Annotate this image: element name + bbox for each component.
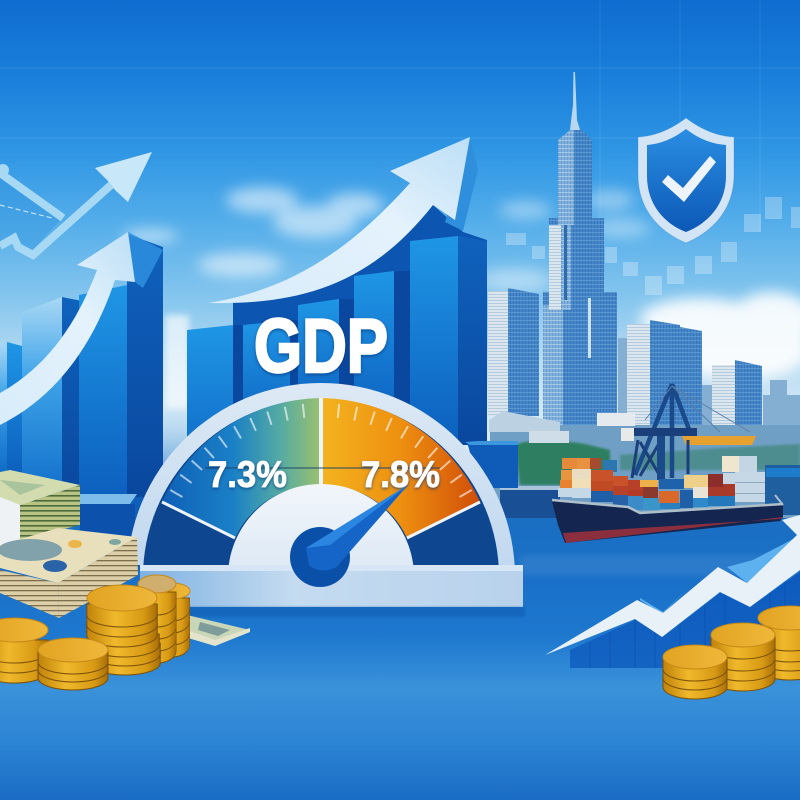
- gauge needle: [290, 485, 408, 587]
- stack 1: [663, 645, 727, 699]
- label 7.3%: 7.3%: [208, 454, 287, 495]
- background grid lines: [0, 0, 800, 230]
- bar 5: [410, 236, 487, 445]
- lower right rising chart: [545, 515, 800, 668]
- sea: [0, 518, 800, 800]
- mid right towers: [627, 320, 702, 434]
- tall skyscraper: [543, 72, 617, 430]
- banknote stacks: [0, 470, 250, 646]
- cargo ship with containers: [552, 456, 783, 543]
- port crane: [621, 384, 756, 480]
- centre bar chart: [187, 205, 518, 500]
- gauge white hub: [228, 484, 414, 565]
- back stack near: [138, 575, 176, 663]
- white zigzag arrow: [545, 515, 800, 655]
- city skyline: [488, 72, 800, 435]
- back panel: [233, 205, 487, 445]
- right base block: [465, 441, 518, 488]
- shadow under gauge: [140, 607, 525, 617]
- ledge and base block: [80, 494, 137, 536]
- large centre stack: [87, 585, 160, 675]
- bar 2: [243, 320, 299, 440]
- bar 3: [298, 299, 354, 420]
- coins lower left: [0, 575, 190, 690]
- title GDP: GDP: [254, 304, 388, 389]
- back stack far: [154, 583, 190, 657]
- centre white growth arrow: [208, 137, 478, 303]
- gauge: [130, 383, 523, 607]
- upper banknote stack: [0, 470, 80, 547]
- gauge dividers: [162, 398, 480, 538]
- bar 1: [0, 342, 22, 475]
- label 7.8%: 7.8%: [361, 454, 440, 495]
- bar 4: [354, 271, 410, 431]
- gauge base plate: [140, 565, 523, 607]
- small loose banknote: [187, 615, 250, 646]
- lower banknote stack: [0, 528, 138, 618]
- right tower: [712, 360, 762, 435]
- bar 3: [79, 234, 163, 500]
- gauge tick marks: [170, 404, 472, 497]
- blue backdrop behind gauge left side: [130, 400, 195, 570]
- left white growth arrow: [0, 232, 163, 425]
- chart bar stripes: [590, 582, 785, 668]
- pale data squares: [506, 197, 800, 295]
- left stack: [0, 618, 48, 683]
- icon: security shield with check mark: [638, 118, 734, 243]
- blue chart area: [570, 572, 800, 668]
- left bar chart: [0, 234, 163, 536]
- bar 1: [187, 325, 243, 500]
- far background buildings: [618, 338, 800, 435]
- gauge right orange sector: [321, 398, 480, 538]
- light band on water: [520, 555, 800, 575]
- light blue arrow facets: [640, 537, 797, 614]
- clouds: [122, 187, 800, 410]
- pale line chart arrow, top left: [0, 152, 152, 255]
- gauge left blue-green sector: [162, 398, 321, 538]
- gauge outer ring: [130, 383, 515, 565]
- front stack: [38, 638, 108, 690]
- stack 2: [711, 623, 775, 691]
- port shoreline with trees: [489, 411, 800, 531]
- left office tower: [488, 288, 539, 416]
- bar 2: [22, 297, 82, 500]
- coins lower right: [663, 606, 800, 699]
- stack 3: [758, 606, 800, 680]
- background sky: [0, 0, 800, 560]
